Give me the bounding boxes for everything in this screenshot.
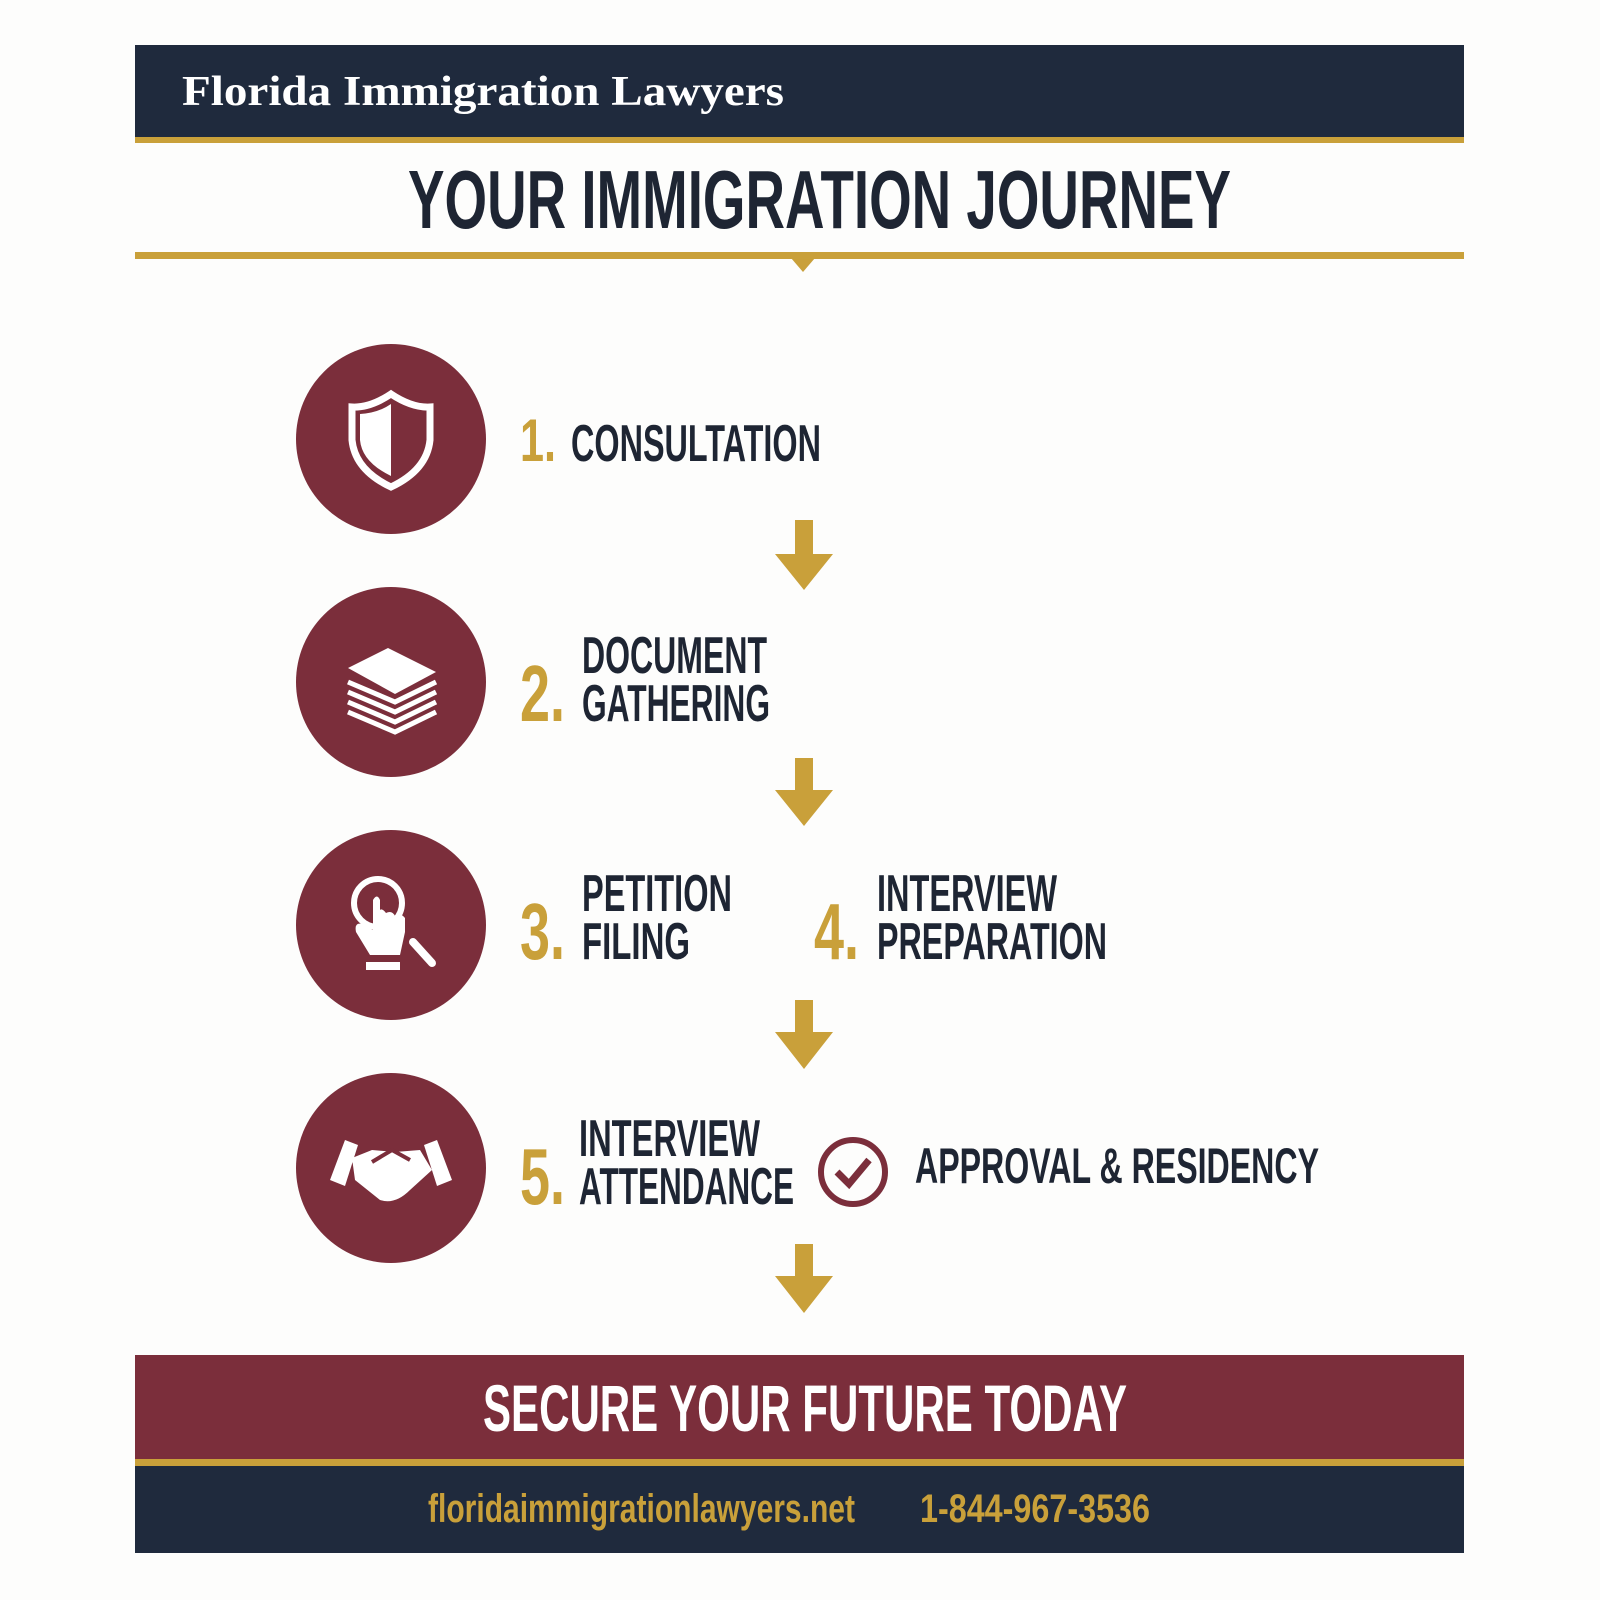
- step 3 and 4: petition filing, interview preparation: PETITION: [582, 865, 732, 923]
- icon: check circle: [821, 1140, 885, 1204]
- footer call to action: SECURE YOUR FUTURE TODAY: [483, 1371, 1127, 1445]
- arrow 2: [775, 758, 833, 826]
- footer contact: [135, 1466, 1464, 1553]
- step 5: interview attendance and approval: INTERVIEW: [579, 1110, 761, 1168]
- step 3 and 4: petition filing, interview preparation: [296, 830, 1107, 1020]
- footer contact: 1-844-967-3536: [920, 1487, 1150, 1531]
- label 3: 3.: [520, 887, 565, 976]
- step 3 and 4: petition filing, interview preparation: INTERVIEW: [877, 865, 1058, 923]
- step 2: document gathering: GATHERING: [582, 675, 770, 733]
- step 2: document gathering: [296, 587, 770, 777]
- step 3 and 4: petition filing, interview preparation: PREPARATION: [877, 913, 1107, 971]
- label 4: 4.: [814, 887, 859, 976]
- title underline with pointer: [135, 252, 1464, 272]
- arrow 4: [775, 1244, 833, 1313]
- footer contact: floridaimmigrationlawyers.net: [428, 1487, 855, 1531]
- header brand text: Florida Immigration Lawyers: [182, 69, 784, 115]
- step 2: document gathering: DOCUMENT: [582, 627, 767, 685]
- label 2: 2.: [520, 649, 565, 738]
- icon: shield: [296, 344, 486, 534]
- step 1: consultation: [296, 344, 821, 534]
- step 3 and 4: petition filing, interview preparation: FILING: [582, 913, 690, 971]
- footer call to action: [135, 1355, 1464, 1459]
- step 1: consultation: CONSULTATION: [571, 415, 821, 473]
- icon: document stack: [296, 587, 486, 777]
- arrow 3: [775, 1000, 833, 1069]
- icon: hand with magnifier: [296, 830, 486, 1020]
- label 1: 1.: [520, 407, 556, 474]
- step 5: interview attendance and approval: ATTENDANCE: [579, 1158, 794, 1216]
- approval label: APPROVAL & RESIDENCY: [915, 1138, 1319, 1194]
- step 5: interview attendance and approval: [296, 1073, 1319, 1263]
- icon: handshake: [296, 1073, 486, 1263]
- header bar: [135, 45, 1464, 143]
- label 5: 5.: [520, 1132, 565, 1221]
- arrow 1: [775, 520, 833, 590]
